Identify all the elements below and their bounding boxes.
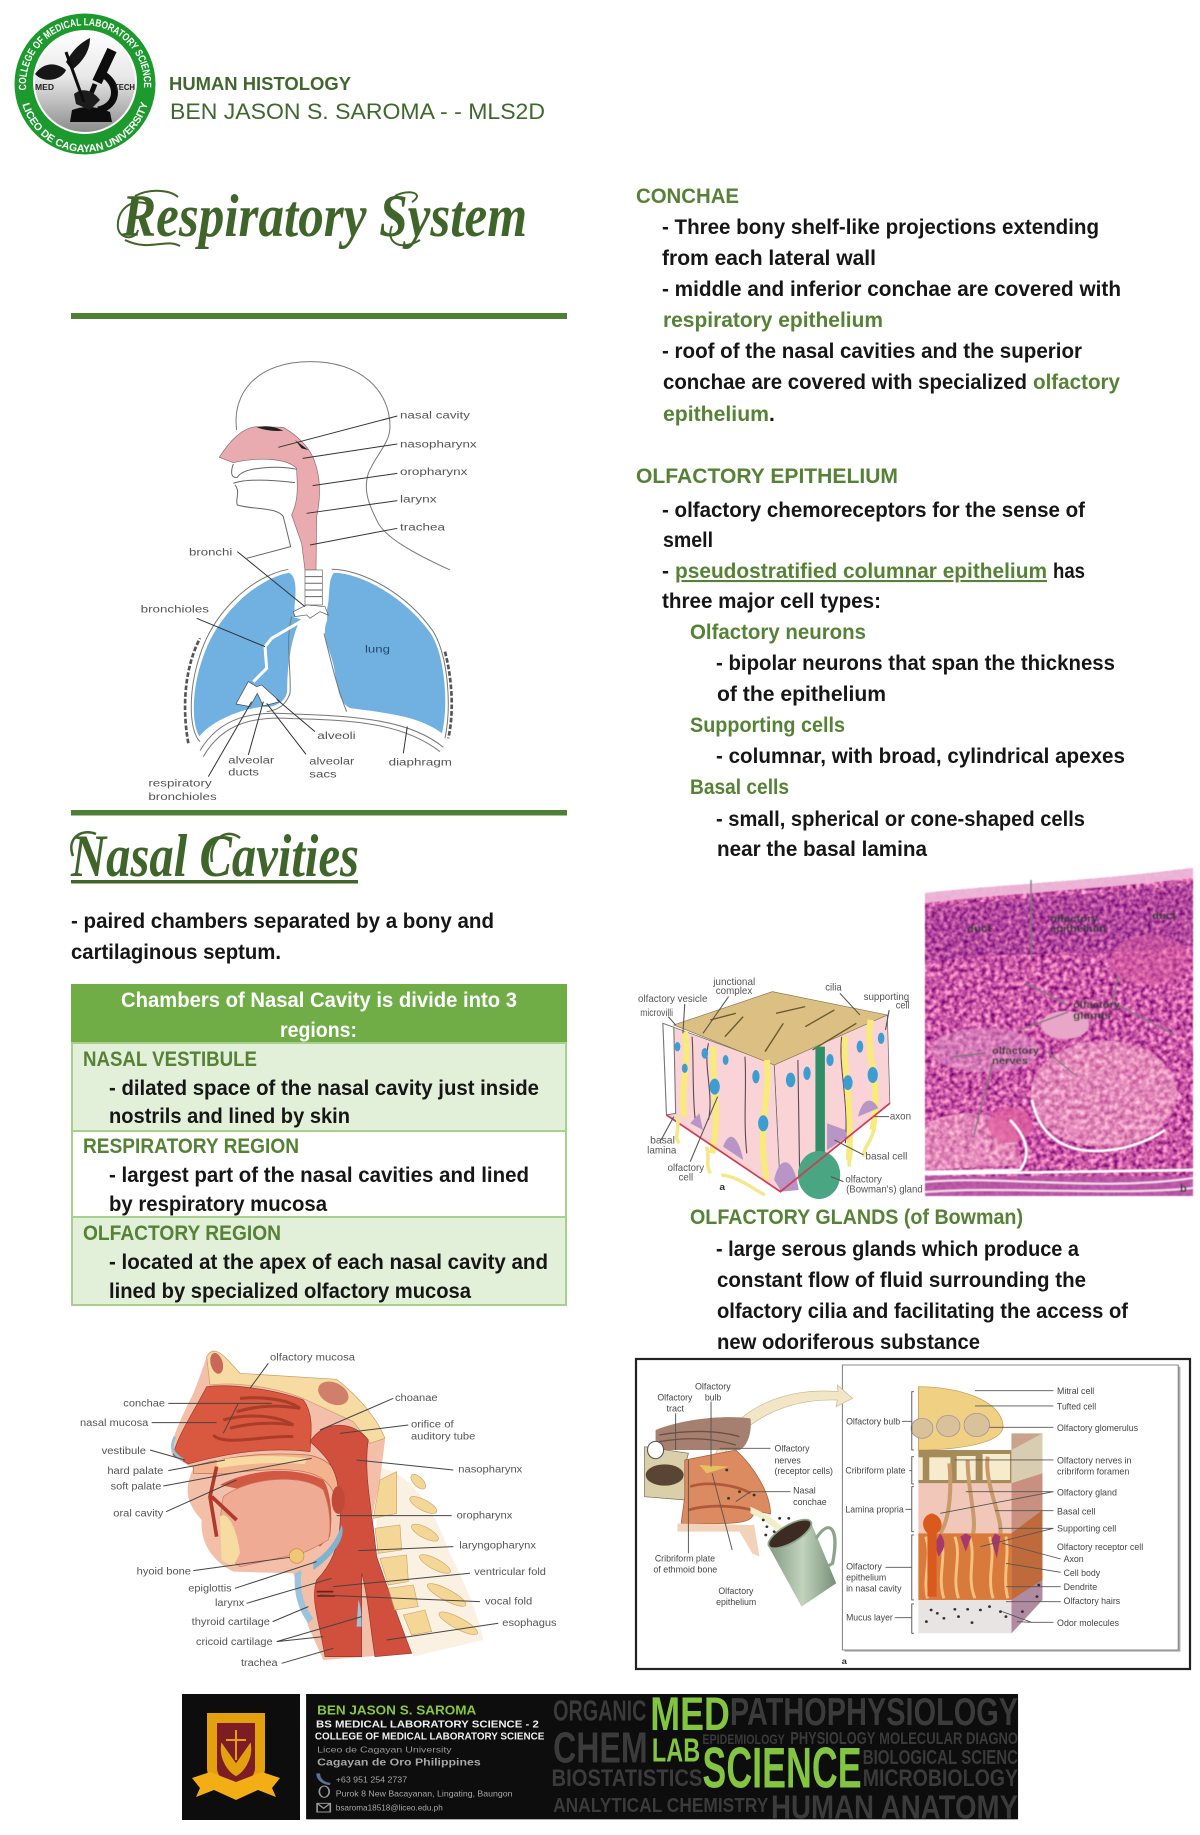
text block: conchae: . xyxy=(769,403,775,426)
diagram labels xyxy=(638,977,923,1195)
text block: olfactory glands: constant flow of fluid surrounding the xyxy=(717,1269,1086,1292)
diagram labels: Cribriform plate xyxy=(845,1465,906,1476)
diagram labels: laryngopharynx xyxy=(459,1540,536,1551)
head outline xyxy=(236,362,450,570)
inset frame xyxy=(845,1367,1180,1652)
diagram labels xyxy=(141,410,477,803)
diagram labels: epiglottis xyxy=(188,1584,232,1595)
icon: college seal logo: MED xyxy=(35,82,54,92)
row: olfactory region: lined by specialized olfactory mucosa xyxy=(109,1280,471,1303)
gland spots xyxy=(1041,1011,1089,1039)
diagram labels: a xyxy=(842,1656,848,1666)
nasal cavity xyxy=(173,1386,311,1464)
diagram labels: nasal cavity xyxy=(400,410,470,421)
text block: olfactory glands: - large serous glands which produce a xyxy=(716,1238,1079,1261)
diagram labels: auditory tube xyxy=(411,1431,476,1442)
lungs xyxy=(193,572,302,738)
diagram labels: Mucus layer xyxy=(846,1612,893,1623)
diagram labels: olfactory xyxy=(668,1163,705,1174)
micrograph labels: olfactory xyxy=(992,1045,1039,1057)
row: olfactory region: OLFACTORY REGION xyxy=(83,1222,281,1245)
diagram labels: Cribriform plate xyxy=(655,1553,715,1564)
text: nasal cavity definition: cartilaginous septum. xyxy=(71,941,281,964)
text block: olfactory epithelium: - olfactory chemoreceptors for the sense of xyxy=(662,499,1086,522)
table header: regions: xyxy=(280,1019,357,1042)
header text xyxy=(169,74,545,124)
row: nasal vestibule xyxy=(72,1043,566,1131)
diagram labels: basal xyxy=(650,1136,675,1146)
figure frame: olfactory pathway xyxy=(636,1359,1190,1669)
diagram labels: oral cavity xyxy=(113,1509,163,1520)
micrograph labels: duct xyxy=(1152,910,1177,922)
contact details: BS MEDICAL LABORATORY SCIENCE - 2 xyxy=(316,1719,539,1730)
leader lines xyxy=(952,880,1175,1135)
trachea rings xyxy=(305,570,322,605)
contact details: Purok 8 New Bacayanan, Lingating, Baungon xyxy=(336,1789,513,1799)
contact details: +63 951 254 2737 xyxy=(336,1775,407,1785)
contact details: Liceo de Cagayan University xyxy=(317,1745,452,1755)
diagram labels: nasal mucosa xyxy=(80,1418,149,1429)
micrograph labels: epithelium xyxy=(1050,923,1106,935)
table: chambers of nasal cavity xyxy=(71,984,567,1305)
text block: olfactory epithelium: smell xyxy=(663,529,713,552)
diagram labels: Olfactory bulb xyxy=(846,1416,900,1426)
diagram labels: lamina xyxy=(647,1146,677,1156)
diagram labels xyxy=(80,1353,557,1669)
text block: olfactory glands xyxy=(690,1206,1129,1354)
supporting cell boundaries xyxy=(692,1037,846,1180)
contact details: BEN JASON S. SAROMA xyxy=(317,1703,476,1718)
diagram labels: nerves xyxy=(775,1455,801,1465)
diagram labels: Olfactory xyxy=(718,1585,754,1596)
diagram labels: olfactory xyxy=(845,1175,883,1185)
text block: olfactory epithelium: Olfactory neurons xyxy=(690,621,866,644)
diagram labels: supporting xyxy=(864,992,909,1003)
diagram labels: lung xyxy=(365,644,390,655)
diagram labels: diaphragm xyxy=(389,757,452,768)
diagram labels: hyoid bone xyxy=(137,1567,191,1578)
diagram labels: conchae xyxy=(793,1496,827,1507)
diagram labels: Olfactory hairs xyxy=(1064,1595,1120,1606)
diagram labels: Nasal xyxy=(793,1485,816,1496)
bronchi xyxy=(293,605,328,618)
text block: olfactory epithelium: Basal cells xyxy=(690,776,789,799)
text block: conchae xyxy=(636,185,1121,426)
micrograph labels: glands xyxy=(1073,1010,1111,1022)
leader lines xyxy=(661,993,889,1182)
word cloud: EPIDEMIOLOGY xyxy=(702,1732,785,1748)
micrograph labels xyxy=(967,910,1187,1195)
contact details: COLLEGE OF MEDICAL LABORATORY SCIENCE xyxy=(315,1731,544,1742)
diagram labels: (Bowman's) gland xyxy=(846,1185,923,1195)
skin and skull xyxy=(171,1350,410,1660)
diagram labels: Olfactory glomerulus xyxy=(1057,1422,1138,1433)
diagram labels: Olfactory xyxy=(695,1381,731,1391)
word cloud: ORGANIC xyxy=(553,1696,646,1727)
diagram labels: axon xyxy=(890,1112,911,1122)
course name: HUMAN HISTOLOGY xyxy=(169,74,351,94)
author name: BEN JASON S. SAROMA - - MLS2D xyxy=(170,99,545,124)
infographic page: MICROBIOLOGY xyxy=(863,1764,1018,1791)
row: nasal vestibule: nostrils and lined by skin xyxy=(109,1105,350,1128)
diagram labels: Olfactory gland xyxy=(1057,1487,1117,1497)
diagram labels: epithelium xyxy=(716,1596,756,1607)
diagram labels: Olfactory xyxy=(657,1392,693,1403)
diagram labels: Axon xyxy=(1064,1553,1084,1564)
diagram labels: complex xyxy=(716,986,753,997)
diagram labels: Cell body xyxy=(1064,1567,1100,1578)
diagram labels: respiratory xyxy=(148,779,212,790)
diagram labels: alveolar xyxy=(309,757,355,768)
footer: university seal card xyxy=(182,1694,300,1820)
row: olfactory region: - located at the apex of each nasal cavity and xyxy=(109,1251,548,1274)
table header: Chambers of Nasal Cavity is divide into 3 xyxy=(121,989,517,1012)
diagram labels: trachea xyxy=(241,1658,278,1669)
neck glow xyxy=(377,1467,483,1657)
odor stream xyxy=(750,1507,783,1530)
diagram labels: oropharynx xyxy=(400,467,467,478)
diagram labels: ducts xyxy=(228,768,259,779)
nasal passages xyxy=(681,1450,771,1524)
diagram labels: bronchioles xyxy=(148,792,217,803)
diagram: respiratory tract xyxy=(141,362,477,803)
hard and soft palate xyxy=(193,1454,347,1497)
heading: olfactory epithelium: OLFACTORY EPITHELIUM xyxy=(636,465,898,488)
text block: conchae: - middle and inferior conchae are covered with xyxy=(662,278,1121,301)
text block: olfactory epithelium: - xyxy=(662,560,669,583)
row: respiratory region: - largest part of the nasal cavities and lined xyxy=(109,1164,529,1187)
diagram labels: nasopharynx xyxy=(458,1465,522,1476)
icon: college seal logo: LICEO DE CAGAYAN UNIVERSITY xyxy=(22,101,148,152)
icon: college seal logo: COLLEGE OF MEDICAL LABORATORY SCIENCE xyxy=(18,18,152,90)
row: respiratory region: RESPIRATORY REGION xyxy=(83,1135,299,1158)
brain and bone xyxy=(656,1417,751,1450)
diagram labels: larynx xyxy=(215,1598,244,1609)
text block: conchae: - roof of the nasal cavities and the superior xyxy=(662,340,1082,363)
diagram labels: trachea xyxy=(400,523,446,534)
diagram labels: choanae xyxy=(395,1393,438,1404)
diagram labels: Olfactory nerves in xyxy=(1057,1455,1132,1465)
icon: college seal logo: TECH xyxy=(114,82,135,92)
diagram labels: epithelium xyxy=(846,1572,886,1583)
diagram labels: Mitral cell xyxy=(1057,1385,1094,1396)
coffee mug xyxy=(764,1514,836,1607)
diagram labels: Olfactory xyxy=(846,1561,882,1571)
diagram: head sagittal section xyxy=(80,1350,557,1669)
diagram: olfactory pathway xyxy=(645,1365,1180,1666)
contact details: Cagayan de Oro Philippines xyxy=(317,1757,481,1768)
spine xyxy=(373,1472,480,1638)
text block: olfactory epithelium: pseudostratified columnar epithelium xyxy=(675,560,1047,583)
text block: olfactory epithelium: Supporting cells xyxy=(690,714,845,737)
diagram labels: cell xyxy=(896,1001,910,1012)
olfactory cells xyxy=(683,1020,875,1180)
diagram labels: bronchioles xyxy=(141,604,209,615)
text block: olfactory epithelium: - small, spherical or cone-shaped cells xyxy=(716,808,1085,831)
text block: olfactory epithelium: has xyxy=(1053,560,1085,583)
diagram labels: olfactory vesicle xyxy=(638,994,708,1005)
row: respiratory region: by respiratory mucosa xyxy=(109,1193,327,1216)
diagram labels: Supporting cell xyxy=(1057,1523,1116,1534)
infographic page: MOLECULAR DIAGNO xyxy=(879,1729,1018,1748)
diagram labels: in nasal cavity xyxy=(846,1583,902,1594)
text block: olfactory glands: new odoriferous substance xyxy=(717,1331,980,1354)
micrograph labels: olfactory xyxy=(1050,913,1098,925)
diagram labels: Odor molecules xyxy=(1057,1617,1119,1628)
diagram labels: basal cell xyxy=(865,1152,907,1162)
nuclei xyxy=(675,1033,884,1087)
micrograph labels: b xyxy=(1180,1183,1187,1195)
diagram labels: microvilli xyxy=(640,1008,673,1019)
diagram labels: conchae xyxy=(123,1399,165,1410)
diagram labels: Dendrite xyxy=(1064,1581,1097,1592)
diagram labels: cribriform foramen xyxy=(1057,1466,1129,1476)
diagram labels: nasopharynx xyxy=(400,439,477,450)
text block: olfactory epithelium: - bipolar neurons that span the thickness xyxy=(716,652,1115,675)
brackets and leader lines xyxy=(676,1391,1061,1633)
micrograph labels: olfactory xyxy=(1073,999,1120,1011)
left face xyxy=(663,1023,780,1192)
diagram labels: sacs xyxy=(309,769,337,780)
text block: conchae: epithelium xyxy=(663,403,769,426)
epithelium dark layer xyxy=(925,884,1193,962)
text block: conchae: respiratory epithelium xyxy=(663,309,883,332)
diagram labels: junctional xyxy=(712,977,755,988)
diagram labels: olfactory mucosa xyxy=(270,1353,355,1364)
fissures xyxy=(925,1100,1193,1174)
diagram labels: of ethmoid bone xyxy=(653,1564,717,1575)
text block: conchae: conchae are covered with specialized xyxy=(663,371,1027,394)
diagram labels: Olfactory receptor cell xyxy=(1057,1541,1143,1552)
word cloud xyxy=(551,1690,1018,1826)
text block: olfactory glands: olfactory cilia and facilitating the access of xyxy=(717,1300,1129,1323)
heading: Nasal Cavities: Nasal Cavities xyxy=(70,823,359,889)
word cloud: ANALYTICAL CHEMISTRY xyxy=(553,1794,768,1816)
duct and Bowman gland xyxy=(815,1047,825,1162)
micrograph labels: duct xyxy=(967,923,992,935)
diagram labels: soft palate xyxy=(111,1481,162,1492)
oral cavity and tongue xyxy=(220,1471,331,1547)
heading: olfactory glands: OLFACTORY GLANDS (of Bowman) xyxy=(690,1206,1023,1229)
diagram labels: bronchi xyxy=(189,548,232,559)
word cloud: CHEM xyxy=(553,1724,648,1772)
contact details: bsaroma18518@liceo.edu.ph xyxy=(336,1803,443,1813)
text block: olfactory epithelium: of the epithelium xyxy=(717,683,886,706)
row: nasal vestibule: NASAL VESTIBULE xyxy=(83,1048,257,1071)
diagram labels: cell xyxy=(679,1173,693,1183)
footer: contact and word cloud banner xyxy=(306,1687,1018,1826)
text block: conchae: olfactory xyxy=(1033,371,1120,394)
diagram: olfactory epithelium block xyxy=(638,977,923,1199)
text block: olfactory epithelium: - columnar, with broad, cylindrical apexes xyxy=(716,745,1125,768)
diagram labels: oropharynx xyxy=(457,1510,512,1521)
text: nasal cavity definition: - paired chambers separated by a bony and xyxy=(71,910,494,933)
micrograph labels: nerves xyxy=(992,1055,1028,1067)
text block: olfactory epithelium: near the basal lamina xyxy=(717,838,927,861)
row: respiratory region xyxy=(72,1131,566,1217)
leader lines xyxy=(197,416,407,777)
row: nasal vestibule: - dilated space of the nasal cavity just inside xyxy=(109,1077,539,1100)
surface xyxy=(674,992,887,1065)
diagram labels: larynx xyxy=(400,494,437,505)
diagram labels: (receptor cells) xyxy=(775,1465,833,1476)
micrograph: olfactory mucosa xyxy=(925,868,1193,1196)
icon: university shield xyxy=(192,1713,280,1800)
tissue base xyxy=(925,868,1193,1196)
diagram labels: orifice of xyxy=(411,1419,454,1430)
olfactory bulb block xyxy=(918,1387,1003,1450)
icon: college seal logo xyxy=(14,14,156,154)
diagram labels: Basal cell xyxy=(1057,1506,1095,1517)
pharynx and trachea xyxy=(310,1425,412,1657)
diagram labels xyxy=(653,1381,1143,1666)
basal cells xyxy=(690,1101,878,1192)
text: nasal cavity definition xyxy=(71,910,494,964)
table header xyxy=(71,984,567,1043)
airway xyxy=(219,427,320,570)
diagram labels: thyroid cartilage xyxy=(192,1617,270,1628)
text block: olfactory epithelium: three major cell types: xyxy=(662,590,881,613)
ribs and diaphragm xyxy=(200,713,443,757)
leader lines xyxy=(150,1363,498,1663)
word cloud: BIOSTATISTICS xyxy=(551,1764,702,1791)
footer: contact and word cloud banner: MED xyxy=(650,1687,730,1740)
diagram labels: Tufted cell xyxy=(1057,1401,1096,1411)
text block: olfactory epithelium xyxy=(636,465,1125,861)
diagram labels: cricoid cartilage xyxy=(196,1637,273,1648)
title: Respiratory System xyxy=(121,183,527,249)
diagram labels: ventricular fold xyxy=(474,1567,546,1578)
diagram labels: Olfactory xyxy=(775,1443,810,1454)
diagram labels: alveoli xyxy=(317,731,356,742)
diagram labels: alveolar xyxy=(228,755,275,766)
arrow to inset xyxy=(716,1385,853,1457)
text block: conchae: from each lateral wall xyxy=(662,247,876,270)
right face xyxy=(774,1015,890,1192)
diagram labels: vestibule xyxy=(102,1446,146,1457)
word cloud: PHYSIOLOGY xyxy=(790,1729,875,1748)
diagram labels: hard palate xyxy=(107,1466,164,1477)
text block: conchae: - Three bony shelf-like projections extending xyxy=(662,216,1099,239)
footer: contact and word cloud banner: LAB xyxy=(652,1732,700,1769)
row: olfactory region xyxy=(72,1217,566,1305)
divider bar top xyxy=(71,313,567,319)
divider bar middle xyxy=(71,810,567,816)
nerve bundles xyxy=(1031,1041,1177,1147)
basal lamina xyxy=(666,1103,890,1192)
diagram labels: esophagus xyxy=(502,1618,557,1629)
diagram labels: Lamina propria xyxy=(845,1504,904,1514)
diagram labels: tract xyxy=(667,1403,684,1413)
axons xyxy=(677,1117,874,1195)
diagram labels: vocal fold xyxy=(485,1596,532,1607)
diagram labels: bulb xyxy=(705,1392,721,1403)
contact details xyxy=(315,1703,544,1813)
diagram labels: cilia xyxy=(825,983,842,994)
heading: conchae: CONCHAE xyxy=(636,185,739,208)
footer: contact and word cloud banner: SCIENCE xyxy=(702,1735,862,1800)
diagram labels: a xyxy=(719,1182,726,1193)
